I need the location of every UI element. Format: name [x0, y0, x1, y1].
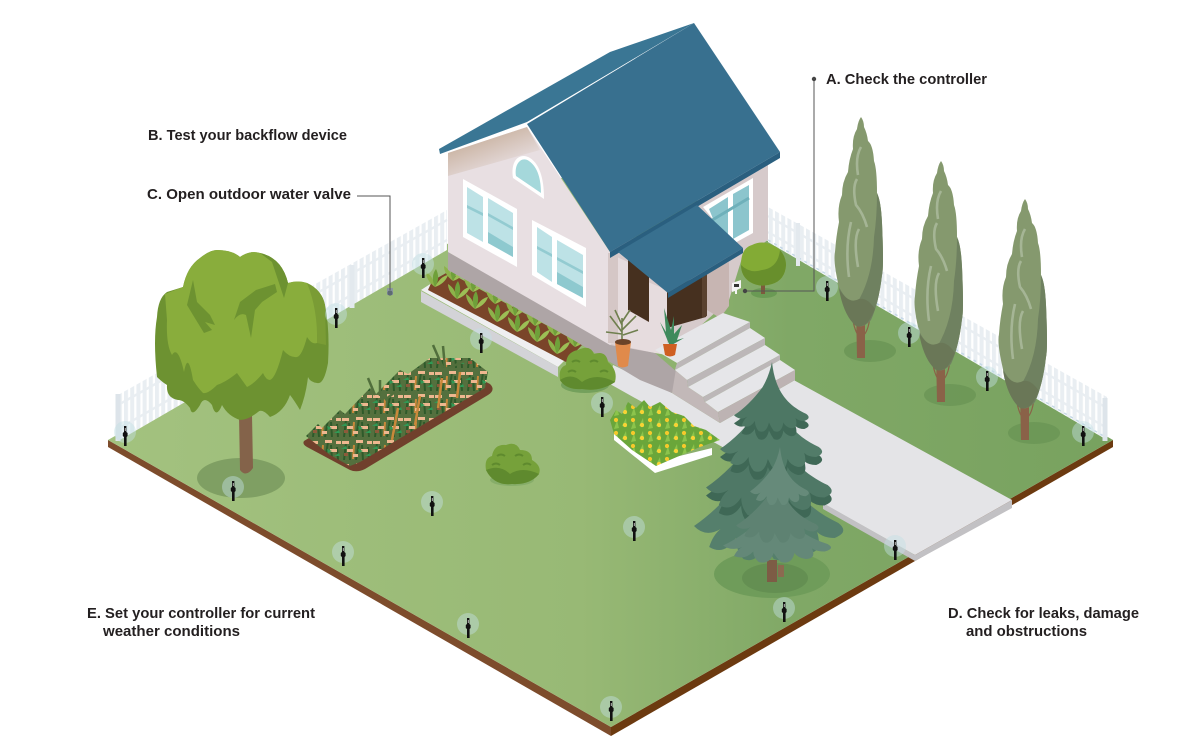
right side wall: [690, 163, 768, 260]
controller: [732, 280, 741, 294]
right picket fence: [768, 207, 1107, 441]
label D: D. Check for leaks, damage: [948, 605, 1139, 622]
lawn bush: [486, 444, 540, 486]
eave shading: [448, 127, 540, 176]
front doors: [628, 260, 707, 328]
potted plant right: [660, 308, 684, 356]
raised planter bed along house: [421, 263, 588, 377]
topiary shrub: [741, 242, 786, 298]
potted plant left: [606, 310, 638, 368]
label E: E. Set your controller for current: [87, 605, 315, 622]
label A: A. Check the controller: [826, 71, 987, 88]
bush near steps: [560, 348, 616, 393]
main roof: [527, 23, 780, 252]
lawn: [108, 150, 1113, 727]
leader line C: [357, 196, 390, 290]
porch pillars: [608, 253, 667, 355]
label D: and obstructions: [966, 623, 1087, 640]
cypress tree 2: [914, 161, 976, 406]
cypress tree 1: [834, 117, 896, 362]
house: [439, 23, 795, 423]
large window right: [532, 220, 586, 307]
garden base: soil edge: [108, 440, 1113, 736]
steps: [655, 313, 795, 423]
house plinth: [448, 252, 677, 393]
left picket fence: [118, 210, 447, 441]
sprinkler heads: [114, 253, 1094, 721]
main roof edge: [610, 152, 780, 258]
leader line A: [743, 77, 816, 293]
label E: weather conditions: [102, 623, 240, 640]
arched window: [512, 156, 544, 199]
side window: [703, 178, 753, 244]
flower bed: mixed garden: [303, 345, 493, 471]
spruce tree: [694, 362, 843, 598]
main roof left slope: [439, 23, 694, 154]
large window left: [463, 179, 517, 267]
outdoor water valve: [387, 288, 393, 296]
front wall: [448, 127, 612, 345]
cypress tree 3: [998, 199, 1060, 444]
label C: C. Open outdoor water valve: [147, 186, 351, 203]
label B: B. Test your backflow device: [148, 127, 347, 144]
concrete walkway: [610, 365, 1012, 561]
porch roof: [618, 205, 743, 298]
porch back wall: [610, 205, 742, 355]
weeping willow tree: [155, 250, 329, 498]
flower bed: yellow flowers: [610, 400, 720, 473]
